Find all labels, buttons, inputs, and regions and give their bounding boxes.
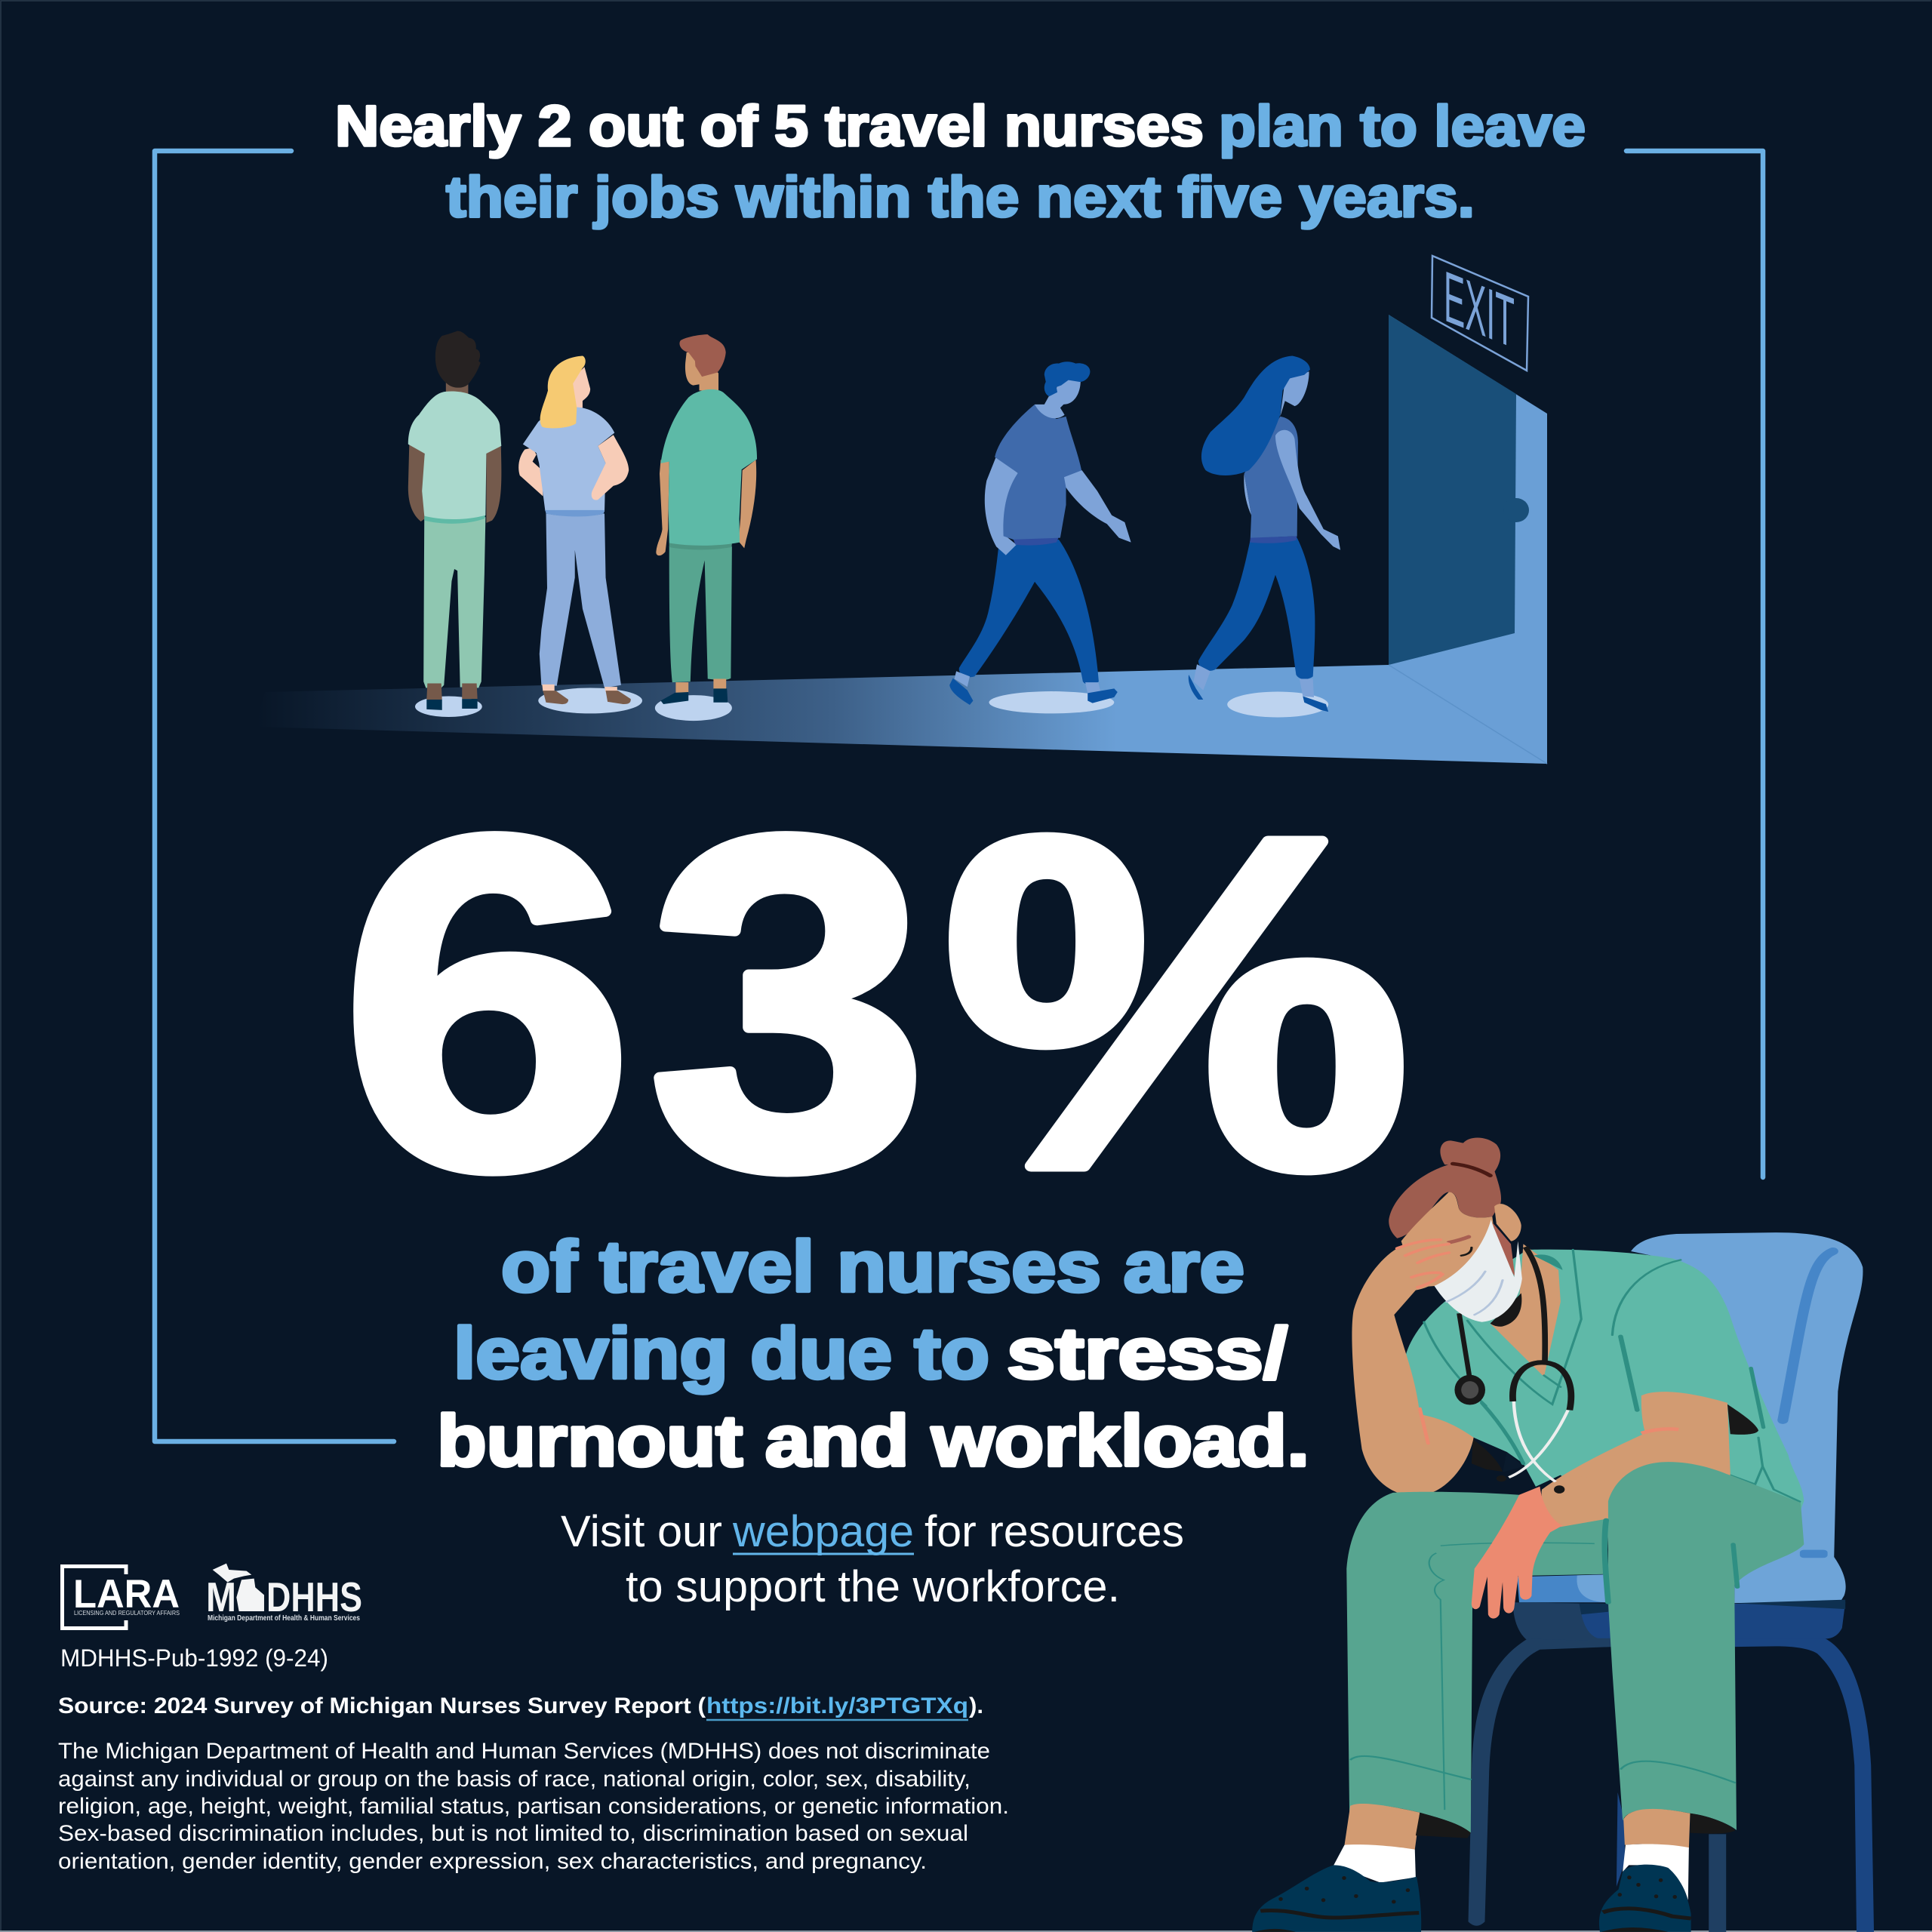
publication number: MDHHS-Pub-1992 (9-24)	[60, 1644, 328, 1672]
nurse torso, arm and head	[1352, 1137, 1804, 1527]
logo: LARA: LICENSING AND REGULATORY AFFAIRS	[74, 1609, 180, 1617]
exit sign: EXIT	[1444, 255, 1515, 364]
title	[335, 94, 1586, 229]
statistic text: burnout and workload.	[437, 1401, 1309, 1481]
nurse: man in green scrubs	[655, 334, 757, 721]
non-discrimination statement	[58, 1739, 1009, 1874]
source line	[58, 1694, 983, 1720]
call to action: webpage	[732, 1507, 914, 1556]
nurse: mint scrubs	[408, 331, 501, 717]
statistic text: stress/	[1007, 1313, 1287, 1394]
call to action	[561, 1507, 1184, 1611]
statistic text: leaving due to	[454, 1313, 989, 1394]
figure group: three standing nurses	[408, 331, 757, 721]
non-discrimination statement: Sex-based discrimination includes, but is not limited to, discrimination based on sexual	[58, 1821, 968, 1846]
call to action: to support the workforce.	[626, 1562, 1120, 1611]
statistic text: of travel nurses are	[501, 1226, 1244, 1307]
floor and door scene	[255, 315, 1547, 764]
logo: MDHHS: DHHS	[266, 1574, 362, 1620]
non-discrimination statement: religion, age, height, weight, familial status, partisan considerations, or genetic information.	[58, 1794, 1009, 1819]
figure group: two walkers leaving	[949, 356, 1340, 717]
chair seat and legs	[1469, 1509, 1874, 1932]
big number	[340, 740, 1411, 1266]
logo: MDHHS: Michigan Department of Health & Human Services	[208, 1614, 360, 1623]
nurse: blonde in blue scrubs	[518, 356, 642, 713]
big number: 3	[648, 740, 928, 1266]
source line: Source: 2024 Survey of Michigan Nurses Survey Report (	[58, 1694, 706, 1718]
logo: MDHHS	[206, 1564, 362, 1623]
call to action: for resources	[924, 1507, 1184, 1556]
source line: ).	[969, 1694, 983, 1718]
walker: man	[949, 361, 1131, 713]
chair back	[1631, 1232, 1863, 1570]
non-discrimination statement: The Michigan Department of Health and Human Services (MDHHS) does not discriminate	[58, 1739, 990, 1764]
non-discrimination statement: against any individual or group on the basis of race, national origin, color, sex, disability,	[58, 1767, 971, 1792]
big number: 6	[340, 740, 634, 1266]
illustration: exhausted nurse on chair	[1252, 1137, 1874, 1932]
call to action: Visit our	[561, 1507, 722, 1556]
logo: LARA	[62, 1567, 180, 1629]
logo: LARA: LARA	[73, 1572, 180, 1617]
walker: woman	[1189, 356, 1340, 717]
nurse legs, hand and shoes	[1252, 1462, 1804, 1932]
title: plan to leave	[1219, 94, 1586, 158]
title: Nearly 2 out of 5 travel nurses	[335, 94, 1204, 158]
frame lines	[155, 151, 1763, 1441]
non-discrimination statement: orientation, gender identity, gender expression, sex characteristics, and pregnancy.	[58, 1849, 927, 1874]
logo: MDHHS: M	[206, 1574, 236, 1620]
exit sign	[1432, 255, 1528, 371]
title: their jobs within the next five years.	[446, 165, 1475, 229]
statistic text	[437, 1226, 1309, 1481]
source line: https://bit.ly/3PTGTXq	[706, 1694, 968, 1718]
big number: %	[942, 740, 1411, 1266]
